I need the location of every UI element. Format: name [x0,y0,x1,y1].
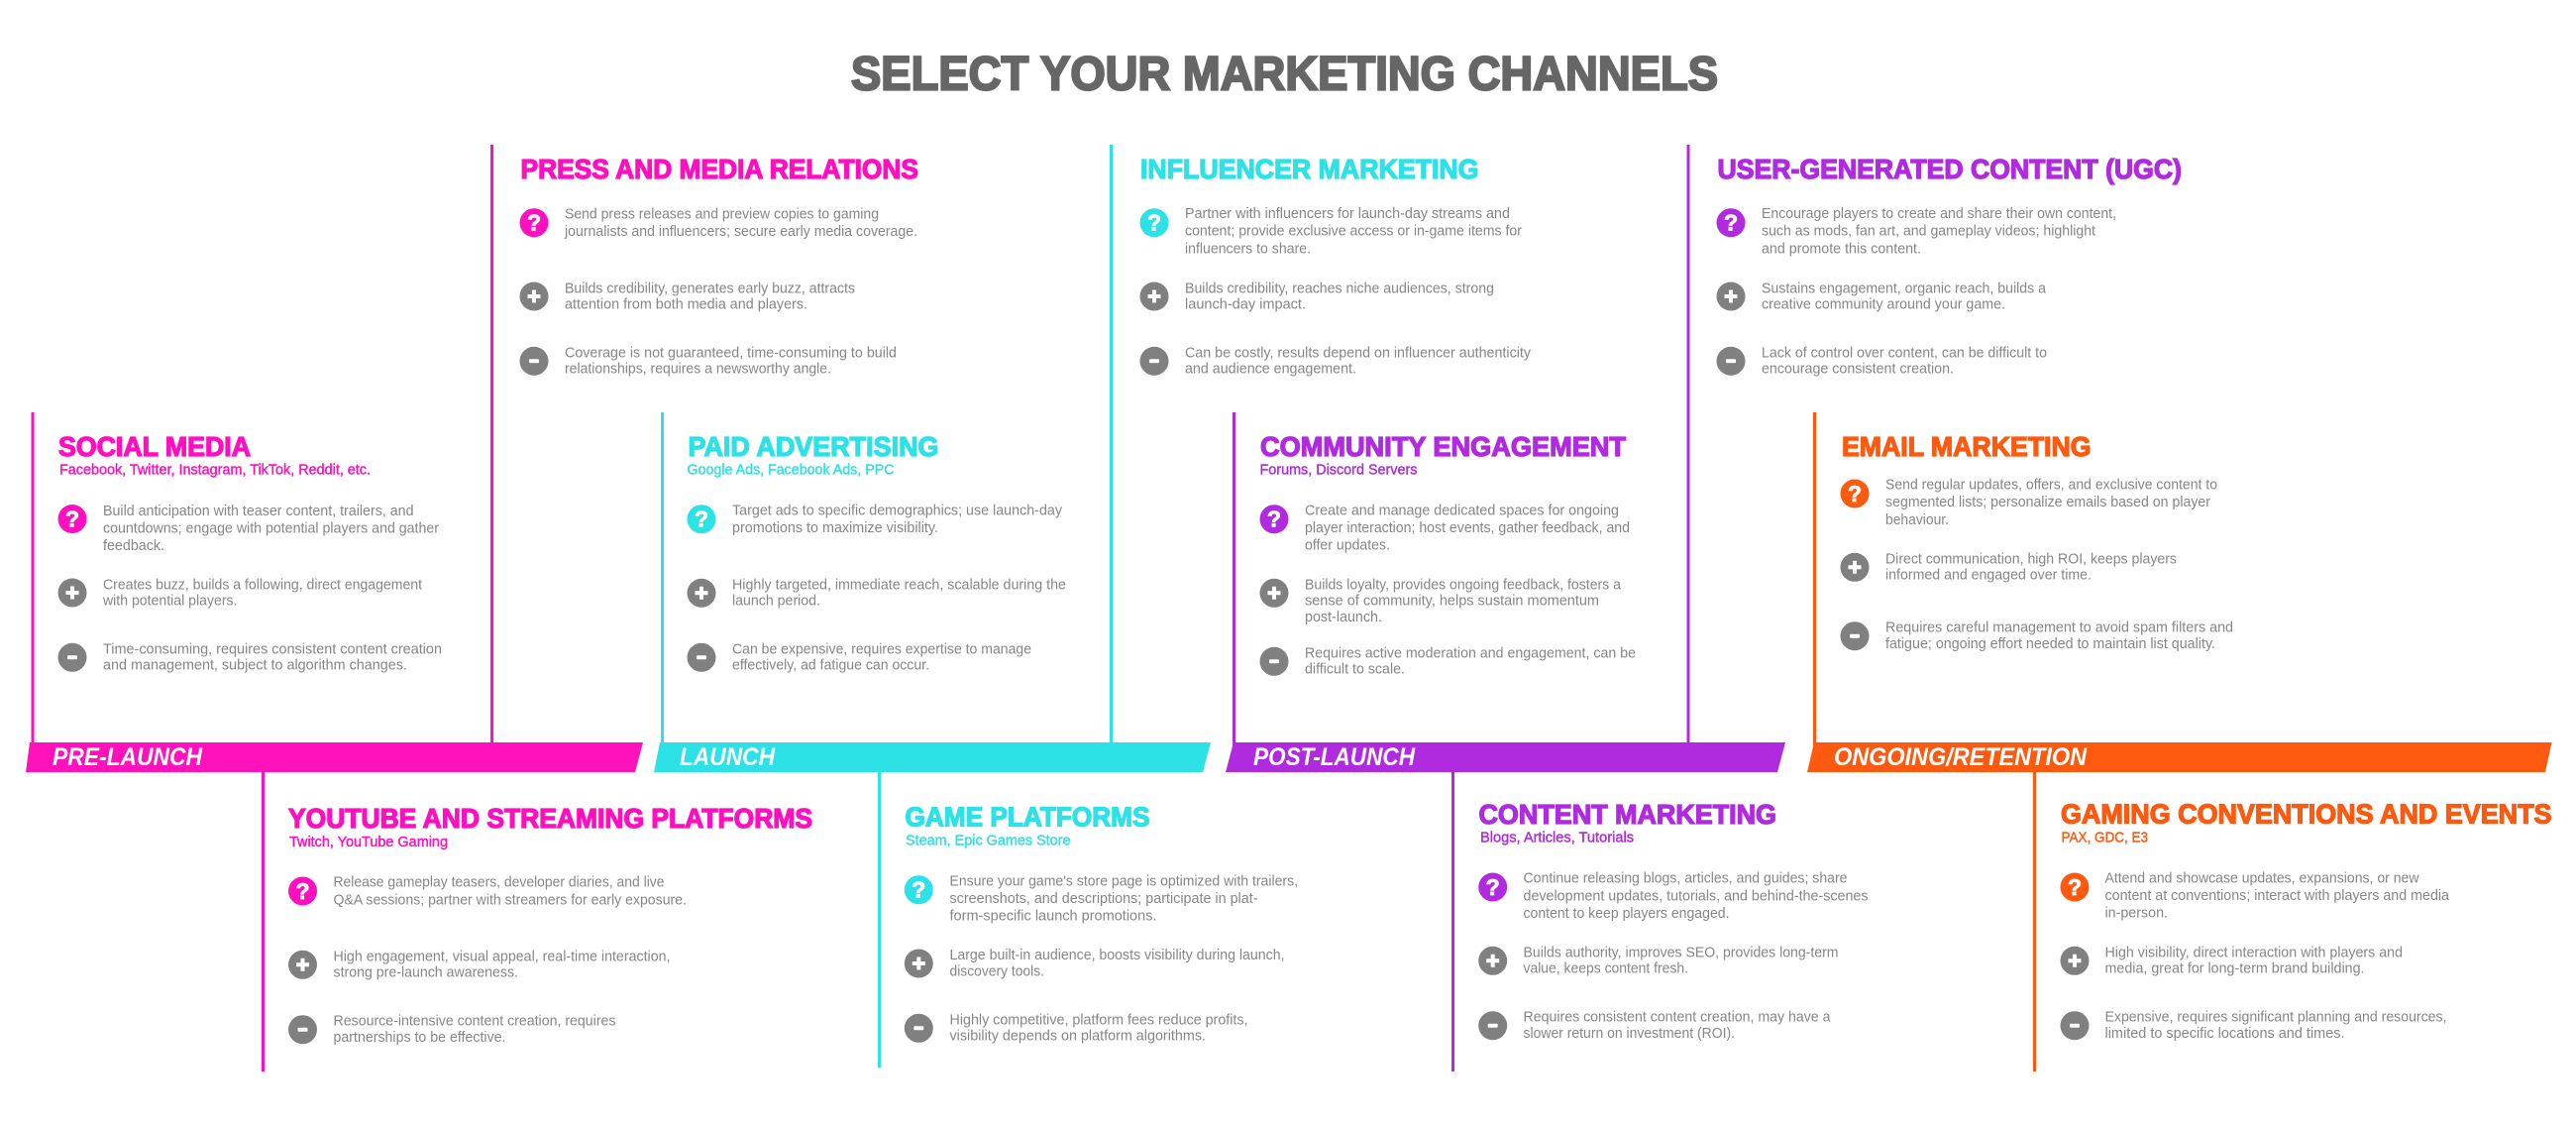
heading: user-generated content: USER-GENERATED CONTENT (UGC) [1718,154,2182,184]
text: cons [103,641,442,674]
text: what: Continue releasing blogs, articles, and guides; share [1524,871,1847,887]
text: cons: visibility depends on platform algorithms. [949,1029,1206,1045]
panel: content marketing [1451,769,1869,1071]
text: pros: launch-day impact. [1185,297,1306,313]
text: what: segmented lists; personalize emails based on player [1885,495,2210,510]
icon: question [688,505,715,533]
heading: press and media relations: PRESS AND MEDIA RELATIONS [521,154,918,184]
icon: question [1841,480,1869,507]
heading: game platforms: GAME PLATFORMS [906,802,1149,833]
phase bar: pre-launch: PRE-LAUNCH [53,743,203,771]
text: what: such as mods, fan art, and gameplay videos; highlight [1762,224,2095,240]
text: pros: Highly targeted, immediate reach, scalable during the [732,577,1066,593]
subheading: social media: Facebook, Twitter, Instagram, TikTok, Reddit, etc. [59,462,371,478]
text: pros [1305,577,1622,625]
text: pros: informed and engaged over time. [1885,568,2092,584]
text: pros: Large built-in audience, boosts visibility during launch, [949,948,1284,963]
text: what [1885,477,2217,528]
icon: question [519,208,549,237]
text: what: Encourage players to create and share their own content, [1762,206,2116,222]
text: what [333,875,687,908]
text: cons: Coverage is not guaranteed, time-consuming to build [565,345,897,361]
icon: plus [905,950,933,977]
text: what: behaviour. [1885,512,1949,528]
icon: minus [1139,347,1169,376]
heading: community engagement: COMMUNITY ENGAGEMENT [1260,431,1626,462]
text: what: in-person. [2104,906,2168,922]
icon: question [1716,208,1746,237]
text: pros: Builds credibility, generates early buzz, attracts [565,282,855,297]
text: what [2104,870,2450,922]
text: what [949,873,1298,925]
text: cons: Resource-intensive content creation, requires [333,1014,616,1030]
icon: plus [519,282,549,311]
icon: minus [1716,347,1746,376]
text: pros [1885,551,2177,584]
text: pros: Direct communication, high ROI, keeps players [1885,551,2177,567]
text: pros: High engagement, visual appeal, real-time interaction, [333,949,670,964]
icon: plus [288,951,317,979]
text: cons [1885,620,2233,652]
icon: question [1260,505,1288,533]
icon: question: ? [1147,210,1161,236]
text: what [1524,871,1869,922]
text: cons [1185,345,1532,377]
text: pros: with potential players. [102,594,238,610]
text: what: journalists and influencers; secure early media coverage. [564,224,917,240]
icon: question [905,875,933,904]
text: pros: strong pre-launch awareness. [333,965,518,981]
text: cons [565,345,897,378]
icon: question: ? [1267,507,1281,532]
text: what: content; provide exclusive access or in-game items for [1185,224,1522,240]
text: pros: discovery tools. [949,963,1044,979]
icon: plus [1139,282,1169,311]
subheading: content marketing: Blogs, Articles, Tutorials [1480,831,1634,846]
phase bar: launch: LAUNCH [680,743,776,771]
text: pros [1185,281,1494,313]
icon: minus [1478,1011,1507,1040]
phase bar: post-launch: POST-LAUNCH [1253,743,1416,771]
icon: question [2061,872,2089,902]
icon: plus [1716,282,1746,311]
icon: question: ? [695,507,708,532]
text: pros: Builds loyalty, provides ongoing feedback, fosters a [1305,577,1622,593]
text: cons: partnerships to be effective. [333,1030,505,1046]
title: SELECT YOUR MARKETING CHANNELS [851,48,1718,101]
icon: plus [2061,947,2089,975]
text: pros [102,577,422,610]
phase bar: pre-launch [26,742,643,772]
text: what [1762,206,2116,257]
text: what: Q&A sessions; partner with streamers for early exposure. [333,892,687,908]
text: what: screenshots, and descriptions; participate in plat- [949,891,1258,907]
text: what: content to keep players engaged. [1524,906,1730,922]
text: cons: Time-consuming, requires consistent content creation [103,641,442,657]
icon: question [57,505,87,533]
icon: plus [688,579,715,608]
text: pros [565,282,855,313]
icon: minus [519,347,549,376]
panel: user-generated content [1686,145,2182,745]
text: what [564,207,917,240]
text: cons [732,641,1031,674]
text: cons: and audience engagement. [1185,361,1356,377]
icon: question [1139,208,1169,237]
icon: question [288,876,317,906]
text: pros [1762,281,2047,313]
text: what: form-specific launch promotions. [949,909,1157,925]
text: cons: fatigue; ongoing effort needed to maintain list quality. [1885,636,2215,652]
text: pros: Builds authority, improves SEO, provides long-term [1524,945,1839,960]
panel: press and media relations [490,145,918,745]
text: cons: Highly competitive, platform fees reduce profits, [949,1012,1248,1028]
icon: question: ? [912,877,925,903]
icon: minus [1260,647,1288,676]
text: what: Create and manage dedicated spaces for ongoing [1305,503,1619,518]
text: what: and promote this content. [1762,241,1921,257]
text: what: offer updates. [1305,538,1390,554]
text: cons: effectively, ad fatigue can occur. [732,658,929,674]
text: what: Send press releases and preview copies to gaming [565,207,879,223]
text: pros [1524,945,1839,977]
text: cons: Can be costly, results depend on influencer authenticity [1185,345,1532,361]
text: cons: Requires consistent content creation, may have a [1524,1010,1831,1026]
text: what [1185,206,1522,257]
text: pros [333,949,670,981]
panel: social media [32,412,442,745]
text: what: Attend and showcase updates, expansions, or new [2104,870,2419,886]
text: cons: Expensive, requires significant planning and resources, [2104,1010,2447,1026]
text: pros: attention from both media and players. [565,297,807,313]
icon: plus [1478,947,1507,975]
text: cons: and management, subject to algorithm changes. [103,658,407,674]
heading: paid advertising: PAID ADVERTISING [688,431,939,462]
text: pros: High visibility, direct interaction with players and [2104,945,2403,960]
icon: minus [1841,621,1869,650]
text: pros: post-launch. [1305,610,1382,625]
text: cons: Requires careful management to avoid spam filters and [1885,620,2233,636]
subheading: game platforms: Steam, Epic Games Store [906,833,1070,848]
panel: email marketing [1813,412,2233,745]
text: what: countdowns; engage with potential players and gather [103,521,439,537]
text: pros: value, keeps content fresh. [1524,961,1688,977]
icon: question [1478,872,1507,902]
text: what [1305,503,1630,554]
icon: question: ? [1724,210,1738,236]
text: what: Send regular updates, offers, and exclusive content to [1885,477,2217,493]
heading: email marketing: EMAIL MARKETING [1842,431,2091,462]
text: cons [1524,1010,1831,1042]
icon: question: ? [1486,874,1500,900]
text: cons: relationships, requires a newsworthy angle. [565,362,831,378]
icon: minus [57,643,87,672]
icon: question: ? [2068,874,2082,900]
heading: content marketing: CONTENT MARKETING [1478,799,1776,830]
text: pros: creative community around your game. [1762,297,2005,313]
subheading: paid advertising: Google Ads, Facebook Ads, PPC [688,462,894,478]
text: pros [732,577,1066,610]
icon: question: ? [1848,481,1862,507]
icon: question: ? [527,210,541,236]
icon: minus [688,643,715,672]
phase bar: post-launch [1226,742,1785,772]
icon: minus [2061,1011,2089,1040]
text: cons: Lack of control over content, can be difficult to [1762,345,2047,361]
icon: question: ? [65,506,79,531]
panel: influencer marketing [1110,145,1532,745]
icon: minus [288,1015,317,1044]
text: pros [2104,945,2403,977]
heading: youtube and streaming platforms: YOUTUBE AND STREAMING PLATFORMS [288,803,812,834]
icon: question: ? [295,878,310,904]
text: what: Partner with influencers for launch-day streams and [1185,206,1510,222]
text: what: Ensure your game's store page is optimized with trailers, [949,873,1298,889]
subheading: youtube and streaming platforms: Twitch, YouTube Gaming [289,835,448,850]
text: cons [333,1014,616,1046]
text: pros: Builds credibility, reaches niche audiences, strong [1185,281,1494,296]
text: pros: Sustains engagement, organic reach, builds a [1762,281,2047,296]
heading: social media: SOCIAL MEDIA [58,431,251,462]
text: cons: slower return on investment (ROI). [1524,1026,1735,1042]
heading: gaming conventions and events: GAMING CONVENTIONS AND EVENTS [2061,799,2552,830]
text: pros: launch period. [732,594,820,610]
text: what: Target ads to specific demographics; use launch-day [732,503,1063,518]
text: cons: encourage consistent creation. [1762,361,1954,377]
panel: game platforms [878,769,1298,1068]
text: cons: Can be expensive, requires expertise to manage [732,641,1031,657]
panel: paid advertising [661,412,1066,745]
text: cons [1762,345,2047,377]
text: what: content at conventions; interact with players and media [2104,888,2450,904]
icon: minus [905,1014,933,1043]
text: what: feedback. [103,538,164,554]
text: cons [2104,1010,2447,1042]
text: what: Release gameplay teasers, developer diaries, and live [333,875,664,891]
phase bar: launch [654,742,1211,772]
text: pros [949,948,1284,979]
text: what [103,504,439,554]
icon: plus [1260,579,1288,608]
panel: gaming conventions and events [2033,769,2552,1071]
phase bar: ongoing/retention: ONGOING/RETENTION [1834,743,2088,771]
text: cons: difficult to scale. [1305,662,1405,678]
text: what: influencers to share. [1185,241,1311,257]
text: cons [1305,645,1636,678]
subheading: community engagement: Forums, Discord Servers [1260,462,1417,478]
text: pros: media, great for long-term brand building. [2104,961,2364,977]
panel: youtube and streaming platforms [262,769,812,1071]
text: what: development updates, tutorials, and behind-the-scenes [1524,888,1869,904]
text: pros: sense of community, helps sustain momentum [1305,594,1599,610]
panel: community engagement [1233,412,1636,745]
phase bar: ongoing/retention [1807,742,2552,772]
text: cons: Requires active moderation and engagement, can be [1305,645,1636,661]
icon: plus [1841,553,1869,582]
text: pros: Creates buzz, builds a following, direct engagement [103,577,422,593]
subheading: gaming conventions and events: PAX, GDC, E3 [2061,830,2148,845]
text: cons: limited to specific locations and times. [2104,1026,2344,1042]
text: what: player interaction; host events, gather feedback, and [1305,520,1630,536]
text: what [732,503,1063,536]
text: cons [949,1012,1248,1045]
icon: plus [57,579,87,607]
heading: influencer marketing: INFLUENCER MARKETING [1140,154,1478,184]
text: what: promotions to maximize visibility. [732,520,938,536]
text: what: Build anticipation with teaser content, trailers, and [103,504,414,519]
